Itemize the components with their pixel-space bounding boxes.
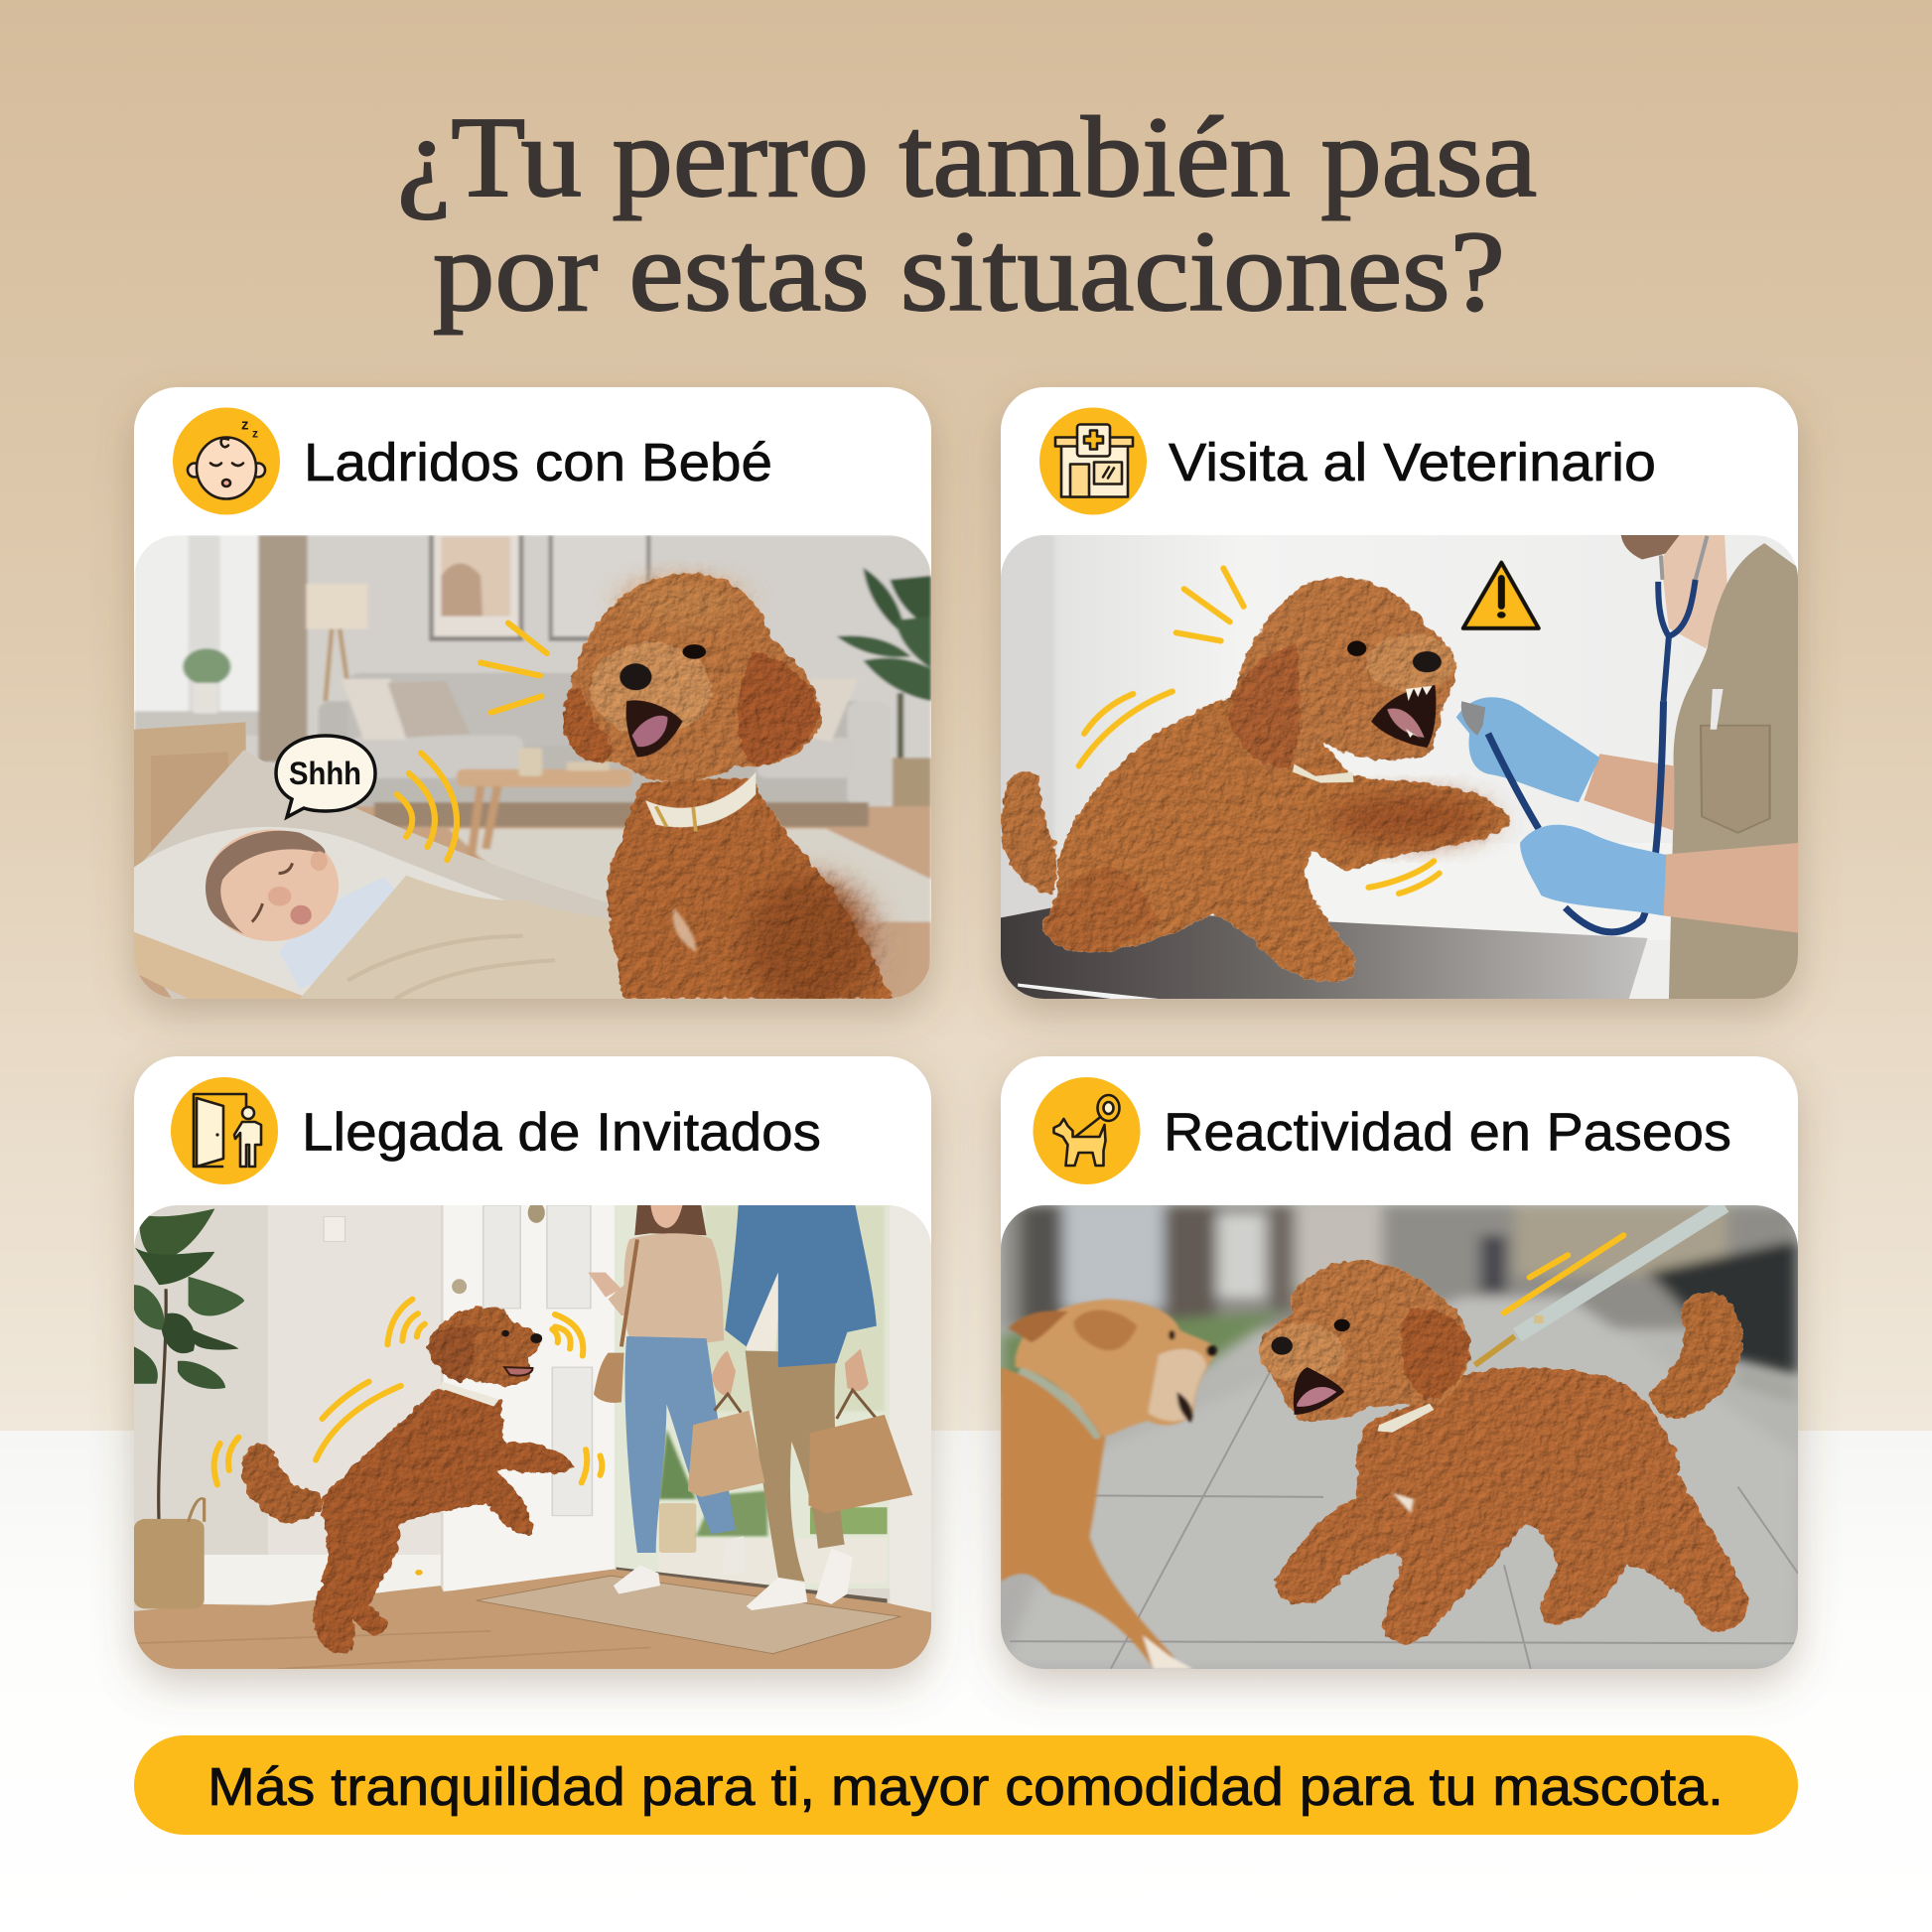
illustration: dog snapping at vet xyxy=(1001,535,1798,999)
outside view xyxy=(615,1205,897,1603)
blurred street background xyxy=(1001,1205,1798,1669)
panel: Llegada de Invitados xyxy=(134,1056,931,1669)
dog xyxy=(563,574,893,1013)
speech bubble: Shhh xyxy=(276,736,375,817)
dog xyxy=(241,1307,574,1654)
card background xyxy=(134,1056,931,1669)
guests xyxy=(588,1205,912,1610)
dog xyxy=(1260,1260,1748,1644)
dog xyxy=(1002,578,1509,983)
icon: sleeping baby: z xyxy=(241,417,248,433)
icon: veterinary clinic xyxy=(1039,407,1147,514)
title xyxy=(397,94,1537,336)
title: por estas situaciones? xyxy=(433,208,1505,336)
panel: Visita al Veterinario xyxy=(1001,387,1798,999)
motion lines xyxy=(1079,691,1440,894)
dog face xyxy=(1293,640,1442,783)
motion lines xyxy=(1504,1235,1623,1312)
sound and motion marks xyxy=(214,1300,602,1484)
panel: Reactividad en Paseos xyxy=(1001,1056,1798,1669)
icon: dog on leash xyxy=(1033,1077,1140,1184)
plant and basket xyxy=(134,1208,244,1608)
sound waves xyxy=(396,753,457,860)
second dog xyxy=(1001,1300,1217,1669)
heading: Visita al Veterinario xyxy=(1169,433,1656,492)
card background xyxy=(134,387,931,999)
icon: sleeping baby xyxy=(173,407,280,514)
illustration: leash reactivity xyxy=(1001,1205,1798,1669)
icon: sleeping baby: z xyxy=(252,427,258,441)
footer banner: Más tranquilidad para ti, mayor comodidad para tu mascota. xyxy=(207,1757,1724,1817)
title: ¿Tu perro también pasa xyxy=(397,94,1537,221)
card background xyxy=(1001,1056,1798,1669)
dog face xyxy=(440,1330,542,1407)
illustration: dog jumping at guests xyxy=(134,1202,931,1669)
heading: Reactividad en Paseos xyxy=(1164,1102,1731,1162)
vet xyxy=(1456,535,1798,999)
warning sign xyxy=(1463,563,1539,628)
heading: Llegada de Invitados xyxy=(302,1102,821,1162)
bark marks xyxy=(481,623,547,713)
card background xyxy=(1001,387,1798,999)
icon: door and visitor xyxy=(171,1077,278,1184)
heading: Ladridos con Bebé xyxy=(304,433,772,492)
dog face xyxy=(1271,1319,1434,1514)
bark marks xyxy=(1176,568,1244,640)
leash xyxy=(1475,1205,1725,1365)
illustration: baby and dog in living room xyxy=(134,535,931,1013)
dog face xyxy=(620,644,756,952)
panel: Ladridos con Bebé xyxy=(134,387,931,1013)
door xyxy=(444,1202,615,1590)
footer banner xyxy=(134,1735,1798,1835)
speech bubble: Shhh: Shhh xyxy=(289,756,361,791)
